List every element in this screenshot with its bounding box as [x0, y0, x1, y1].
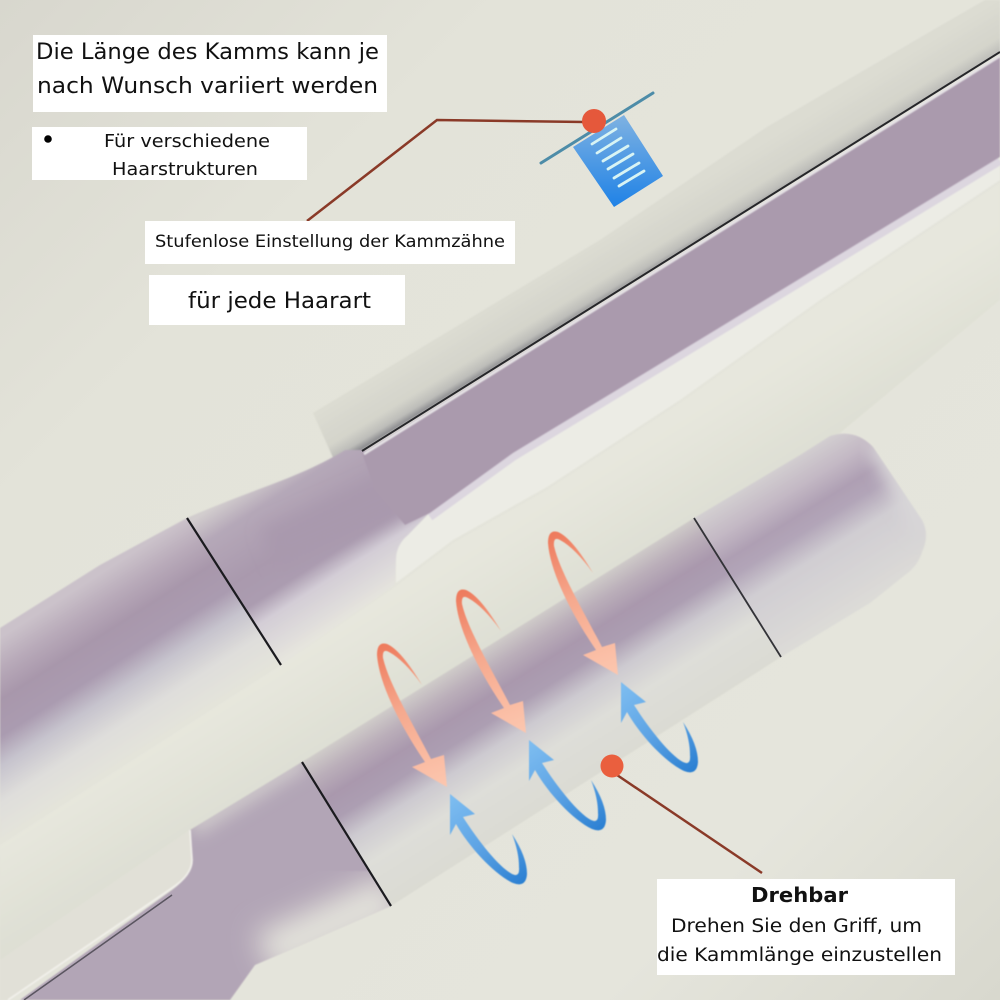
purple comb strip	[362, 55, 1000, 525]
callout: rotatable: Drehbar	[751, 883, 849, 907]
heading box: comb length	[33, 35, 387, 112]
marker: rotate	[600, 754, 624, 778]
text box: stepless adjustment: Stufenlose Einstellung der Kammzähne	[155, 232, 505, 251]
text box: every hair type: für jede Haarart	[188, 288, 371, 314]
left handle segment	[0, 518, 281, 845]
connector: comb teeth callout	[307, 120, 585, 221]
lower strip edge line	[24, 895, 172, 1000]
rotation arrows: left pair	[377, 643, 527, 884]
seam line 2	[302, 762, 391, 906]
connector: rotate callout	[617, 775, 762, 873]
black line along comb	[362, 52, 1000, 451]
lavender rim below strip	[430, 161, 1000, 517]
text box: every hair type	[149, 275, 405, 325]
groove outline	[8, 830, 192, 1000]
heading box: comb length: nach Wunsch variiert werden	[37, 73, 378, 99]
text box: stepless adjustment	[145, 221, 515, 264]
seam line 1	[187, 518, 281, 665]
white tab beside the handle	[396, 157, 1000, 583]
text box: hair structures: Haarstrukturen	[112, 159, 258, 180]
main white band of the comb	[0, 183, 1000, 960]
lower handle off-white area	[0, 830, 192, 1000]
handle segment right of seam	[188, 450, 428, 646]
white highlight under black line	[364, 56, 1000, 454]
rounded end cap	[695, 433, 926, 656]
seam line 3	[694, 518, 781, 657]
heading box: comb length: Die Länge des Kamms kann je	[36, 39, 379, 65]
text box: hair structures: Für verschiedene	[104, 131, 270, 152]
rotation arrows: right pair	[548, 531, 698, 772]
callout: rotatable	[657, 879, 955, 975]
lower purple grip	[20, 762, 390, 1000]
callout: rotatable: Drehen Sie den Griff, um	[671, 916, 922, 937]
rotating grip cylinder	[302, 518, 781, 906]
text box: hair structures	[32, 127, 307, 180]
callout: rotatable: die Kammlänge einzustellen	[657, 945, 942, 966]
marker: comb teeth	[582, 109, 606, 133]
icon: comb length scale	[541, 93, 663, 207]
comb body: upper slab	[313, 0, 1000, 462]
rotation arrows: middle pair	[456, 589, 606, 830]
